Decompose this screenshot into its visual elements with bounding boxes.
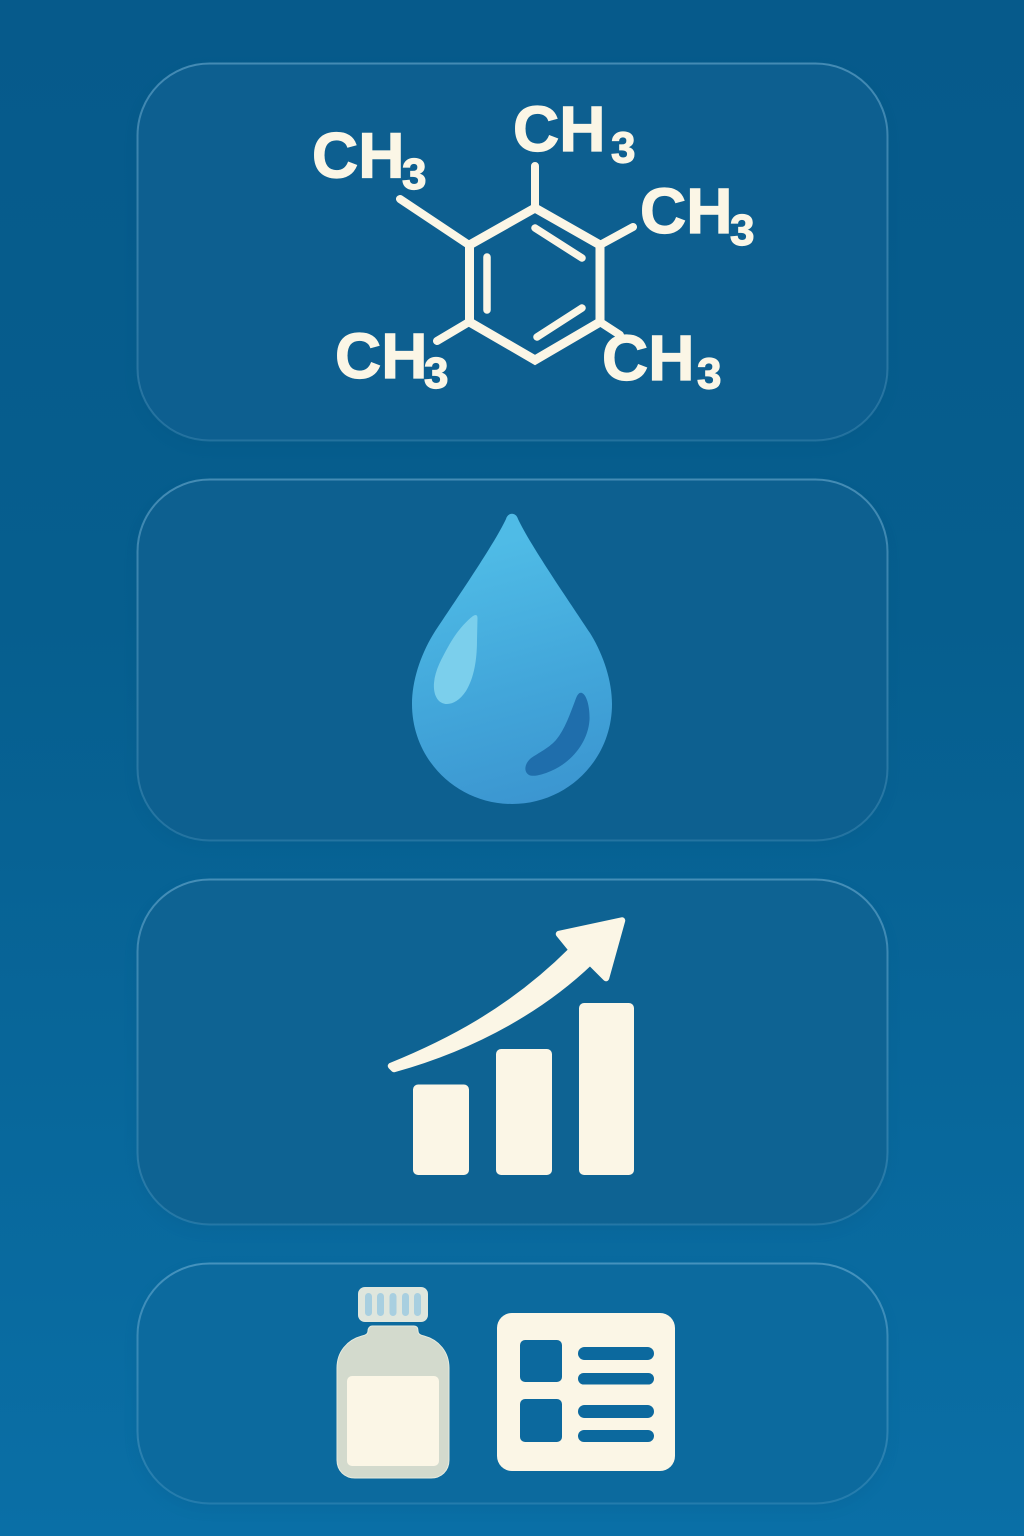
bar 3 [579, 1003, 634, 1175]
panel: growth chart [137, 880, 888, 1230]
bar 1 [413, 1084, 469, 1175]
label: lower right CH3: CH [602, 322, 694, 394]
label: right CH3: CH [640, 175, 732, 247]
square 1 [520, 1340, 562, 1382]
panel: molecule [137, 64, 888, 446]
label: left CH3: 3 [402, 150, 426, 199]
text lines [578, 1347, 654, 1442]
rising arrow [391, 920, 622, 1069]
bar 2 [496, 1049, 552, 1175]
label: top CH3: CH [513, 93, 605, 165]
bottle label [347, 1376, 439, 1466]
label: lower left CH3: CH [335, 320, 427, 392]
icon: supplement bottle [337, 1287, 449, 1478]
bottle body [337, 1326, 449, 1478]
cap ridges [365, 1293, 421, 1316]
bottle cap [358, 1287, 428, 1322]
chemical structure [312, 93, 754, 398]
drop highlight [434, 615, 478, 704]
icon: bar chart with rising arrow [391, 920, 634, 1175]
methyl bonds [400, 166, 633, 341]
benzene ring [470, 208, 600, 360]
label: right CH3: 3 [730, 206, 754, 255]
panel: water drop [137, 480, 888, 846]
icon: water drop [412, 514, 612, 804]
label: top CH3: 3 [611, 124, 635, 172]
square 2 [520, 1399, 562, 1442]
icon: nutrition facts card [497, 1313, 675, 1471]
label: lower left CH3: 3 [424, 349, 448, 398]
label: lower right CH3: 3 [697, 350, 721, 398]
drop shadow crescent [525, 693, 590, 776]
label: left CH3: CH [312, 120, 404, 192]
panel: bottle and label [137, 1264, 888, 1509]
